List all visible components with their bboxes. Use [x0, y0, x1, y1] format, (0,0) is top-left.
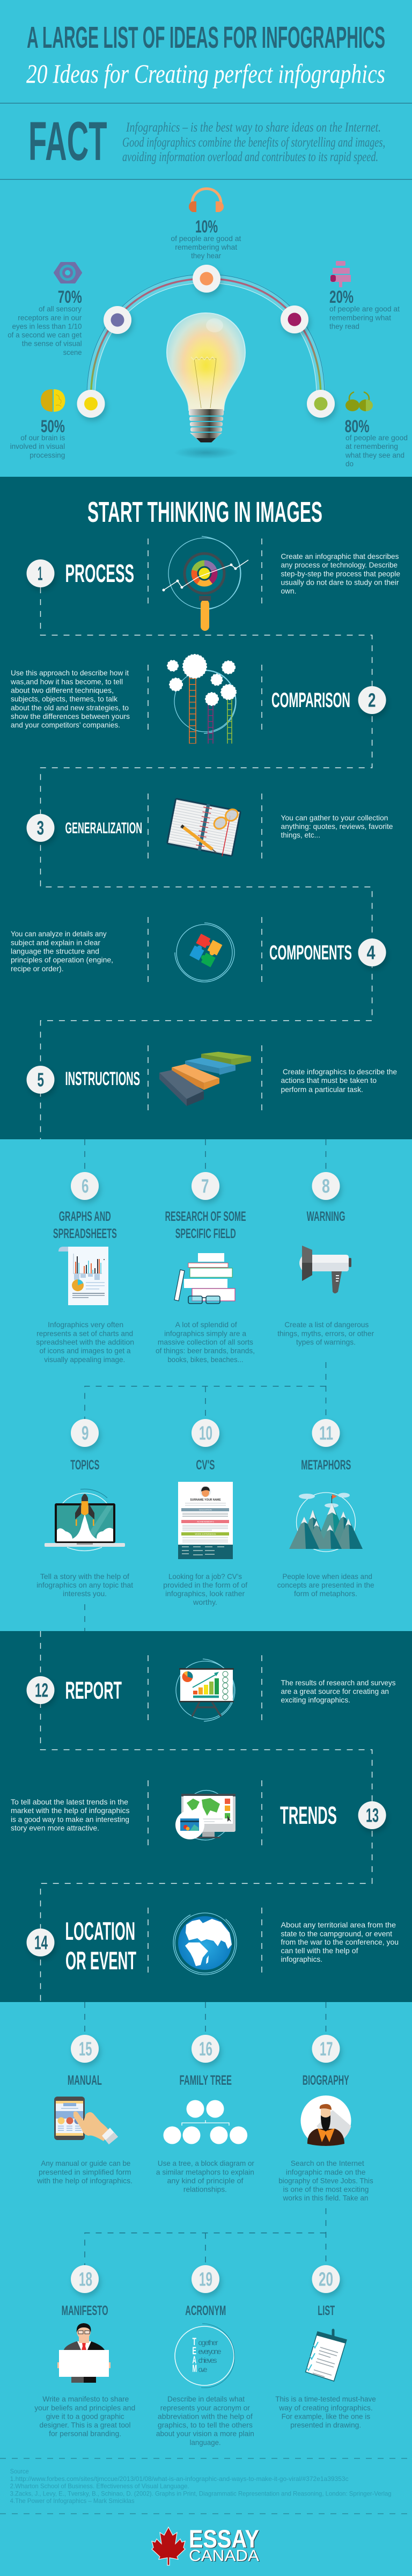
wordmark: CANADA [190, 2548, 260, 2565]
number badge 14: 14 [34, 1932, 48, 1953]
icon: eye [55, 263, 81, 282]
number badge 17 [312, 2035, 340, 2063]
heading research: RESEARCH OF SOME [165, 1209, 246, 1224]
description location: infographics. [281, 1955, 322, 1963]
description generalization [281, 813, 393, 839]
description graphs: Infographics very often [48, 1320, 123, 1329]
description family tree [156, 2159, 254, 2194]
icon: TEAM acronym ring: A [192, 2355, 196, 2366]
icon: phone and hand [54, 2097, 118, 2144]
heading research: SPECIFIC FIELD [175, 1226, 236, 1241]
node: yellow [77, 390, 105, 418]
description instructions [281, 1067, 397, 1094]
description generalization: anything: quotes, reviews, favorite [281, 822, 393, 831]
wordmark: ESSAY [189, 2524, 259, 2553]
description manifesto: give it to a good graphic [46, 2412, 124, 2421]
description location: state to the campground, or event [281, 1930, 392, 1938]
description location: from the war to the conference, you [281, 1938, 399, 1946]
icon: chart document [58, 1247, 108, 1305]
heading location: OR EVENT [65, 1946, 136, 1975]
description warning: things, myths, errors, or other [277, 1329, 374, 1337]
idea 7: research [156, 1172, 255, 1364]
icon: headphones [189, 189, 224, 212]
description family tree: relationships. [183, 2185, 227, 2194]
description graphs: represents a set of charts and [36, 1329, 133, 1337]
icon: family tree [163, 2100, 247, 2144]
icon: TEAM acronym ring: ogether [198, 2338, 218, 2347]
stat: 10%: remembering what [175, 243, 237, 251]
description metaphors: form of metaphors. [294, 1589, 357, 1598]
description metaphors: concepts are presented in the [277, 1581, 374, 1589]
idea 13: trends [11, 1791, 386, 1840]
description topics: interests you. [63, 1589, 107, 1598]
idea 15: manual [36, 2035, 133, 2185]
description comparison: Use this approach to describe how it [11, 668, 129, 677]
description graphs: of icons and images to get a [40, 1347, 131, 1355]
description manifesto: Write a manifesto to share [42, 2395, 129, 2403]
heading research [165, 1209, 246, 1241]
description comparison: about two different techniques, [11, 686, 114, 695]
number badge 12: 12 [35, 1679, 48, 1701]
node: magenta [281, 305, 308, 333]
description manifesto: for personal branding. [49, 2429, 121, 2438]
description biography: is one of the most exciting [283, 2185, 369, 2194]
description warning: types of warnings. [296, 1338, 356, 1347]
description list: This is a time-tested must-have [275, 2395, 376, 2403]
heading report: REPORT [65, 1677, 122, 1704]
senses arc [87, 274, 325, 397]
icon: CV document: SURNAME YOUR NAME [190, 1498, 221, 1502]
number badge 3 [27, 814, 55, 842]
stat: 20%: of people are good at [329, 304, 400, 313]
heading manifesto: MANIFESTO [62, 2303, 108, 2318]
icon: stack of books [174, 1253, 235, 1304]
idea 2: comparison [10, 654, 386, 744]
icon: CV document: WORK EXPERIENCE [195, 1533, 216, 1536]
idea 16: family tree [156, 2035, 254, 2194]
description comparison: about the old and new strategies, to [11, 703, 129, 712]
connector: dashed path 1-5 [41, 587, 372, 1139]
description process: step-by-step the process that people [281, 569, 400, 578]
number badge 1: 1 [38, 563, 43, 584]
connector: drops to ideas 15-17 [85, 2002, 326, 2037]
number badge 4 [358, 938, 386, 966]
heading generalization: GENERALIZATION [65, 820, 142, 837]
stat: 80%: 80% [345, 417, 370, 436]
number badge 10 [192, 1419, 219, 1447]
stat: 10%: they hear [191, 251, 221, 260]
description acronym: represents your acronym or [160, 2403, 250, 2412]
stat: 70%: 70% [58, 287, 82, 307]
stat: 70%: of all sensory [39, 304, 82, 313]
stat: 70%: scene [63, 348, 82, 356]
description family tree: Use a tree, a block diagram or [158, 2159, 254, 2167]
icon: mountains [289, 1493, 363, 1552]
description location [281, 1920, 399, 1963]
idea 9: topics [36, 1419, 133, 1598]
icon: TEAM acronym ring: E [192, 2346, 196, 2357]
background: top panel [0, 0, 412, 477]
description biography: works in this field. Take an [283, 2193, 368, 2202]
description trends: story even more attractive. [11, 1823, 99, 1832]
heading trends: TRENDS [280, 1801, 337, 1829]
description biography: Search on the Internet [291, 2159, 364, 2167]
number badge 14 [27, 1929, 55, 1956]
stat: 20% [329, 287, 400, 331]
connector: ideas 17 to 18-20 [85, 2208, 326, 2268]
number badge 10: 10 [199, 1422, 212, 1444]
icon: megaphone [299, 1246, 351, 1293]
heading list: LIST [318, 2303, 335, 2318]
description trends [11, 1798, 130, 1832]
heading cvs: CV'S [196, 1458, 215, 1473]
number badge 7: 7 [201, 1175, 209, 1197]
description components: subject and explain in clear [11, 938, 100, 947]
description process: any process or technology. Describe [281, 561, 398, 569]
background: dark panel ideas 12-14 [0, 1631, 412, 2002]
icon: bearded man portrait [300, 2095, 351, 2146]
idea 18: manifesto [34, 2265, 135, 2438]
description components: language the structure and [11, 947, 99, 956]
heading graphs [53, 1209, 117, 1241]
connector: ideas 8 to 9-11 [85, 1362, 326, 1423]
icon: laptop rocket [45, 1489, 125, 1551]
node: green [307, 390, 335, 418]
icon: maple leaf [152, 2527, 185, 2565]
description comparison: and your competitors’ companies. [11, 721, 120, 729]
heading graphs: GRAPHS AND [59, 1209, 111, 1224]
idea 3: generalization [27, 798, 393, 857]
number badge 6: 6 [82, 1175, 89, 1197]
stat: 80%: do [345, 459, 354, 468]
heading topics: TOPICS [70, 1458, 99, 1473]
description research [156, 1320, 255, 1364]
description manual: with the help of infographics. [36, 2176, 133, 2185]
icon: monitor with map [175, 1791, 236, 1840]
description process [281, 552, 400, 595]
icon: man with sign [57, 2323, 111, 2383]
description acronym: abbreviation with the help of [158, 2412, 253, 2421]
description research: A lot of splendid of [175, 1320, 237, 1329]
wordmark [189, 2524, 260, 2565]
heading location [65, 1917, 136, 1975]
wordmark: ESSAY [190, 2525, 260, 2553]
fact heading: FACT [28, 111, 107, 172]
description report: exciting infographics. [281, 1695, 350, 1704]
node: orange [193, 265, 220, 293]
stat: 80%: what they see and [345, 450, 404, 459]
number badge 5 [27, 1066, 55, 1094]
stat: 50%: processing [30, 450, 65, 459]
icon: TEAM acronym ring: everyone [198, 2347, 222, 2356]
description family tree: a similar metaphors to explain [156, 2167, 254, 2176]
heading comparison: COMPARISON [271, 689, 350, 712]
description components: You can analyze in details any [11, 929, 106, 938]
description acronym [156, 2395, 254, 2447]
number badge 18 [71, 2265, 99, 2293]
description biography: infographic made on the [286, 2167, 366, 2176]
description metaphors: People love when ideas and [282, 1572, 372, 1581]
number badge 16: 16 [199, 2038, 212, 2060]
heading metaphors: METAPHORS [301, 1458, 351, 1473]
icon: presentation board [176, 1659, 235, 1721]
icon: magnifier with chart [162, 536, 248, 631]
description acronym: language. [190, 2438, 221, 2447]
description cvs: provided in the form of of [163, 1581, 247, 1589]
source list [10, 2468, 392, 2505]
description components: principles of operation (engine, [11, 956, 113, 964]
source list: 3.Zacks, J., Levy, E., Tversky, B., Schinao, D. (2002). Graphs in Print, Diagrammatic Representation and Reasoning, London: Springer-Verlag [10, 2490, 392, 2498]
description location: can tell with the help of [281, 1946, 358, 1955]
icon: CV document: EDUCATION [199, 1509, 212, 1511]
number badge 11 [312, 1419, 340, 1447]
number badge 6 [71, 1172, 99, 1200]
description process: Create an infographic that describes [281, 552, 399, 561]
stat: 10%: 10% [195, 217, 218, 236]
logo: essay canada [152, 2524, 260, 2565]
icon: TEAM acronym ring: T [192, 2337, 196, 2348]
source list: Source [10, 2468, 29, 2475]
description process: own. [281, 586, 296, 595]
description cvs: infographics, look rather [165, 1589, 245, 1598]
heading graphs: SPREADSHEETS [53, 1226, 117, 1241]
description topics: Tell a story with the help of [40, 1572, 129, 1581]
description research: of things: beer brands, brands, [156, 1347, 255, 1355]
idea 14: location or event [27, 1911, 399, 1975]
number badge 18: 18 [79, 2268, 92, 2290]
description acronym: about your vision a more plain [156, 2429, 254, 2438]
heading process: PROCESS [65, 559, 134, 587]
description trends: is a good way to make an interesting [11, 1815, 129, 1823]
stat: 70%: of a second we can get [8, 331, 82, 339]
number badge 3: 3 [37, 817, 44, 839]
description topics [36, 1572, 133, 1598]
node: purple [104, 306, 131, 334]
icon: light bulb [167, 313, 245, 459]
description manual: presented in simplified form [39, 2167, 131, 2176]
description comparison: subjects, objects, themes, to talk [11, 695, 118, 703]
stat: 70%: the sense of visual [22, 339, 82, 348]
number badge 19 [192, 2265, 219, 2293]
background: light panel ideas 6-11 [0, 1139, 412, 1631]
idea 12: report [27, 1659, 396, 1721]
number badge 2: 2 [368, 689, 376, 711]
number badge 20 [312, 2265, 340, 2293]
idea 19: acronym [156, 2265, 254, 2447]
description report: The results of research and surveys [281, 1678, 396, 1687]
idea 10: cvs [163, 1419, 247, 1606]
description comparison [10, 668, 130, 729]
number badge 17: 17 [320, 2038, 333, 2060]
description report [281, 1678, 396, 1704]
description process: usually do not dare to study on their [281, 578, 399, 586]
number badge 1 [27, 559, 55, 587]
icon: notebook [166, 798, 241, 857]
source list: 1.http://www.forbes.com/sites/tjmccue/2013/01/08/what-is-an-infographic-and-ways-to-make-it-go-viral/#372e1a39353c [10, 2475, 349, 2483]
description generalization: You can gather to your collection [281, 813, 388, 822]
description cvs: Looking for a job? CV’s [168, 1572, 242, 1581]
stat: 50% [10, 417, 65, 459]
description acronym: graphics, to to tell the others [158, 2421, 253, 2429]
idea 11: metaphors [277, 1419, 374, 1598]
idea 20: list [275, 2265, 376, 2429]
number badge 20: 20 [319, 2268, 333, 2290]
icon: books [330, 261, 351, 287]
stat: 10% [171, 217, 241, 260]
stat: 80%: of people are good [345, 433, 408, 442]
idea 1: process [27, 536, 400, 631]
number badge 9: 9 [82, 1422, 89, 1444]
description components [11, 929, 113, 973]
stat: 80% [345, 417, 408, 468]
source list: 2.Wharton School of Business. Effectiveness of Visual Language. [10, 2483, 189, 2490]
description cvs: worthy. [193, 1598, 217, 1606]
idea 8: warning [277, 1172, 374, 1347]
description acronym: Describe in details what [167, 2395, 245, 2403]
description location: About any territorial area from the [281, 1920, 396, 1929]
icon: TEAM acronym ring: chieves [198, 2356, 217, 2364]
fact block [28, 111, 385, 172]
connector: drops to ideas 6-8 [85, 1139, 326, 1176]
description biography [278, 2159, 373, 2202]
description cvs [163, 1572, 247, 1606]
description manifesto: your beliefs and principles and [34, 2403, 135, 2412]
icon: CV document: ACHIEVEMENTS [197, 1520, 214, 1523]
number badge 12 [27, 1676, 55, 1704]
icon: globe [173, 1911, 237, 1975]
description list: presented in drawing. [290, 2421, 361, 2429]
idea 17: biography [278, 2035, 373, 2202]
description trends: market with the help of infographics [11, 1806, 130, 1815]
description report: are a great source for creating an [281, 1687, 389, 1695]
description manifesto: designer. This is a great tool [40, 2421, 131, 2429]
number badge 2 [358, 686, 386, 714]
number badge 9 [71, 1419, 99, 1447]
description components: recipe or order). [11, 964, 64, 973]
number badge 8: 8 [322, 1175, 330, 1197]
stat: 20%: remembering what [329, 314, 391, 322]
description manifesto [34, 2395, 135, 2438]
description graphs: spreadsheet with the addition [36, 1338, 134, 1347]
icon: ladders and clouds [167, 654, 236, 744]
idea 6: graphs and spreadsheets [36, 1172, 134, 1364]
heading manual: MANUAL [68, 2073, 102, 2088]
description research: books, bikes, beaches... [167, 1355, 244, 1364]
heading family tree: FAMILY TREE [179, 2073, 232, 2088]
icon: clipboard checklist [306, 2330, 347, 2381]
description instructions: Create infographics to describe the [283, 1067, 397, 1076]
heading instructions: INSTRUCTIONS [65, 1068, 140, 1089]
number badge 13: 13 [366, 1804, 379, 1827]
idea 5: instructions [27, 1052, 397, 1106]
description research: infographics simply are a [164, 1329, 246, 1337]
stat: 70%: eyes in less than 1/10 [12, 322, 82, 331]
connector: topics drop to dark panel [84, 1604, 85, 1631]
stat: 10%: of people are good at [171, 234, 241, 243]
description metaphors [277, 1572, 374, 1598]
background: dark panel process [0, 477, 412, 1139]
description manual: Any manual or guide can be [41, 2159, 131, 2167]
description research: massive collection of all sorts [158, 1338, 253, 1347]
heading warning: WARNING [307, 1209, 345, 1224]
icon: TEAM acronym ring [175, 2324, 234, 2388]
number badge 19: 19 [199, 2268, 212, 2290]
heading components: COMPONENTS [269, 942, 352, 964]
icon: TEAM acronym ring: ove [198, 2365, 208, 2374]
icon: CV document [178, 1482, 233, 1559]
icon: TEAM acronym ring: M [192, 2363, 197, 2375]
number badge 15 [71, 2035, 99, 2063]
description trends: To tell about the latest trends in the [11, 1798, 128, 1806]
wordmark: CANADA [189, 2547, 259, 2565]
icon: puzzle [175, 923, 234, 982]
number badge 11: 11 [319, 1422, 333, 1444]
description warning [277, 1320, 374, 1347]
stat: 70% [8, 287, 82, 356]
stat: 70%: receptors are in our [18, 314, 82, 322]
description manual [36, 2159, 133, 2185]
number badge 7 [192, 1172, 219, 1200]
heading biography: BIOGRAPHY [303, 2073, 349, 2088]
description family tree: any kind of principle of [167, 2176, 244, 2185]
stat: 50%: involved in visual [10, 442, 65, 450]
description instructions: perform a particular task. [281, 1085, 363, 1094]
description list: way of creating infographics. [278, 2403, 373, 2412]
description graphs: visually appealing image. [44, 1355, 125, 1364]
heading location: LOCATION [65, 1917, 135, 1945]
stat: 50%: 50% [41, 417, 65, 436]
number badge 5: 5 [38, 1068, 44, 1091]
description list: For example, like the one is [282, 2412, 370, 2421]
description graphs [36, 1320, 134, 1364]
number badge 16 [192, 2035, 219, 2063]
idea 4: components [11, 923, 386, 982]
icon: brain [41, 389, 65, 412]
number badge 15: 15 [79, 2038, 92, 2060]
description topics: infographics on any topic that [36, 1581, 133, 1589]
description biography: biography of Steve Jobs. This [278, 2176, 373, 2185]
heading acronym: ACRONYM [185, 2303, 226, 2318]
source list: 4.The Power of Infographics – Mark Smiciklas [10, 2497, 135, 2505]
number badge 4: 4 [367, 942, 376, 963]
stat: 20%: 20% [329, 287, 354, 307]
number badge 13 [358, 1801, 386, 1829]
stat: 80%: at remembering [345, 442, 398, 450]
fact text [122, 120, 385, 164]
description list [275, 2395, 376, 2429]
icon: stairs [159, 1052, 251, 1106]
stat: 50%: of our brain is [20, 433, 65, 442]
description comparison: was,and how it has become, to tell [10, 678, 123, 686]
background: light panel ideas 15-20 [0, 2002, 412, 2576]
description warning: Create a list of dangerous [284, 1320, 369, 1329]
description instructions: actions that must be taken to [281, 1076, 377, 1085]
connector: dashed path 12-14 [41, 1631, 372, 2002]
number badge 8 [312, 1172, 340, 1200]
stat: 20%: they read [329, 322, 359, 331]
description comparison: show the differences between yours [11, 712, 130, 721]
icon: glasses [345, 392, 373, 411]
description generalization: things, etc... [281, 831, 320, 839]
